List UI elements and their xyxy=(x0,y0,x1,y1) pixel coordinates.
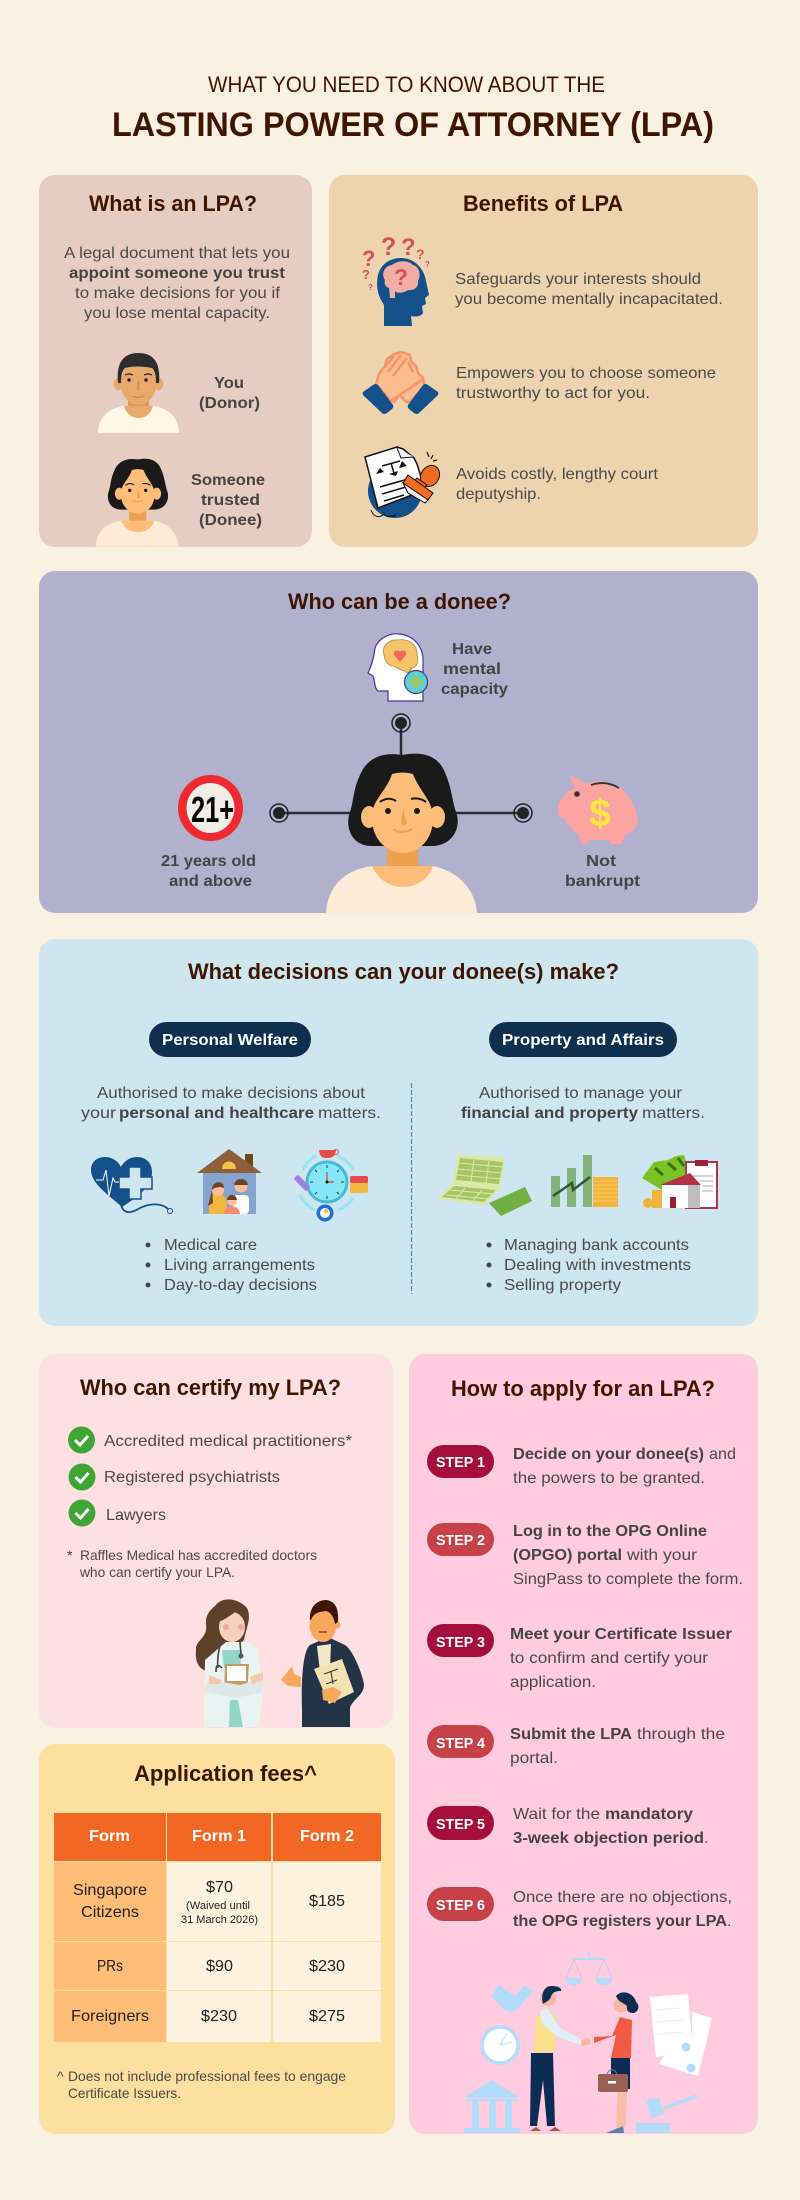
step 1: the powers to be granted. xyxy=(513,1470,705,1487)
icon: mental capacity head xyxy=(368,634,428,701)
icon: 21+ sign xyxy=(178,775,243,841)
list: property and affairs items: Selling property xyxy=(504,1277,621,1294)
step 1: STEP 1 xyxy=(436,1454,485,1471)
step 4: through the xyxy=(637,1726,725,1743)
list: certifiers with check marks: Registered psychiatrists xyxy=(104,1469,280,1486)
step 6: . xyxy=(727,1913,731,1930)
table: fees xyxy=(54,1813,381,2042)
label: you, donor: (Donor) xyxy=(199,395,260,412)
icon: confused head: ? xyxy=(362,246,375,271)
list: certifiers with check marks: Lawyers xyxy=(106,1507,166,1524)
list: certifiers with check marks: Accredited medical practitioners* xyxy=(104,1433,352,1450)
footnote: professional fees: Certificate Issuers. xyxy=(68,2085,181,2101)
step 2: (OPGO) portal xyxy=(513,1547,622,1564)
heading: decisions: What decisions can your donee(s) make? xyxy=(188,959,619,984)
panel: who can certify xyxy=(39,1354,393,1728)
icon: donee woman xyxy=(96,459,179,546)
icon: growth chart and coins xyxy=(551,1155,618,1207)
text: empowers: Empowers you to choose someone xyxy=(456,365,716,382)
table: fees: Foreigners xyxy=(71,2008,149,2025)
label: have mental capacity xyxy=(441,641,508,698)
footnote: raffles medical: Raffles Medical has accredited doctors xyxy=(80,1547,317,1563)
label: someone trusted, donee: trusted xyxy=(201,492,260,509)
pill: personal welfare: Personal Welfare xyxy=(162,1032,298,1049)
panel: what decisions can your donee make xyxy=(39,939,758,1326)
heading: how to apply: How to apply for an LPA? xyxy=(451,1376,715,1401)
step 6 xyxy=(427,1887,732,1930)
text: LPA definition: A legal document that lets you xyxy=(64,245,290,262)
pill: property and affairs: Property and Affairs xyxy=(502,1032,664,1049)
text: avoids court: Avoids costly, lengthy court xyxy=(456,466,659,483)
step 5: Wait for the xyxy=(513,1806,600,1823)
label: 21 years old and above: 21 years old xyxy=(161,853,256,870)
connector lines xyxy=(270,714,532,822)
icon: confused head xyxy=(362,233,430,326)
icon: confused head: ? xyxy=(401,234,416,261)
text: LPA definition: appoint someone you trust xyxy=(69,265,286,282)
icon: donor man xyxy=(98,353,179,433)
step 6: STEP 6 xyxy=(436,1897,485,1914)
label: not bankrupt: Not xyxy=(586,853,617,870)
text: avoids court: deputyship. xyxy=(456,486,541,503)
illustration: lawyer xyxy=(281,1600,364,1727)
table: fees: $90 xyxy=(206,1958,233,1975)
text: property and affairs description: matters. xyxy=(642,1105,705,1122)
icon: clock routine xyxy=(294,1150,368,1222)
panel: application fees xyxy=(39,1744,395,2134)
table: fees: $70 xyxy=(206,1879,233,1896)
icon: confused head: ? xyxy=(425,260,430,269)
step 3: to confirm and certify your xyxy=(510,1650,709,1667)
text: safeguards xyxy=(455,271,723,308)
heading: benefits: Benefits of LPA xyxy=(463,191,623,216)
text: personal welfare description: Authorised to make decisions about xyxy=(97,1085,366,1102)
step 6: the OPG registers your LPA xyxy=(513,1913,727,1930)
footnote: raffles medical: who can certify your LPA. xyxy=(79,1564,235,1580)
step 5: STEP 5 xyxy=(436,1816,485,1833)
icon: document and stamp xyxy=(365,447,443,518)
table: fees: 31 March 2026) xyxy=(181,1914,258,1926)
step 5 xyxy=(427,1806,708,1847)
step 1 xyxy=(427,1445,736,1487)
table: fees: Form xyxy=(89,1828,130,1845)
table: fees: Citizens xyxy=(81,1904,139,1921)
label: someone trusted, donee: Someone xyxy=(191,472,265,489)
list: property and affairs items: Dealing with investments xyxy=(504,1257,691,1274)
list: personal welfare items: Medical care xyxy=(164,1237,257,1254)
table: fees: Form 1 xyxy=(192,1828,246,1845)
footnote: professional fees: ^ xyxy=(57,2068,64,2084)
title xyxy=(112,72,714,144)
footnote: raffles medical xyxy=(67,1547,317,1580)
step 3: Meet your Certificate Issuer xyxy=(510,1626,732,1643)
icon: confused head: ? xyxy=(368,283,373,292)
panel: benefits of LPA xyxy=(329,175,758,547)
table: fees: $230 xyxy=(201,2008,237,2025)
icon: money house and document xyxy=(642,1155,717,1208)
table: fees: $185 xyxy=(309,1893,345,1910)
list: property and affairs items: Managing bank accounts xyxy=(504,1237,689,1254)
step 5: . xyxy=(704,1830,708,1847)
step 3 xyxy=(427,1624,732,1691)
step 2: STEP 2 xyxy=(436,1532,485,1549)
label: 21 years old and above: and above xyxy=(169,873,252,890)
text: empowers: trustworthy to act for you. xyxy=(456,385,650,402)
step 6: Once there are no objections, xyxy=(513,1889,732,1906)
text: safeguards: Safeguards your interests should xyxy=(455,271,701,288)
pill: personal welfare xyxy=(149,1022,311,1057)
list: personal welfare items: Day-to-day decisions xyxy=(164,1277,317,1294)
pill: property and affairs xyxy=(489,1022,677,1057)
text: personal welfare description: your xyxy=(81,1105,117,1122)
heading: certify: Who can certify my LPA? xyxy=(80,1375,341,1400)
heading: donee: Who can be a donee? xyxy=(288,589,511,614)
label: have mental capacity: capacity xyxy=(441,681,508,698)
text: property and affairs description: Authorised to manage your xyxy=(479,1085,683,1102)
label: someone trusted, donee: (Donee) xyxy=(199,512,262,529)
icon: piggy bank: $ xyxy=(589,793,611,835)
label: have mental capacity: Have xyxy=(452,641,492,658)
step 2 xyxy=(427,1523,743,1588)
step 2: Log in to the OPG Online xyxy=(513,1523,707,1540)
step 1: Decide on your donee(s) xyxy=(513,1446,704,1463)
icon: 21+ sign: 21+ xyxy=(191,789,234,830)
table: fees: $275 xyxy=(309,2008,345,2025)
icon: confused head: ? xyxy=(362,267,370,282)
text: property and affairs description: financial and property xyxy=(461,1105,638,1122)
footnote: professional fees xyxy=(57,2068,346,2101)
list: certifiers with check marks xyxy=(68,1426,352,1526)
step 3: application. xyxy=(510,1674,596,1691)
icon: clasped hands xyxy=(363,352,438,414)
title: WHAT YOU NEED TO KNOW ABOUT THE xyxy=(208,72,605,97)
label: have mental capacity: mental xyxy=(443,661,501,678)
panel: how to apply xyxy=(409,1354,758,2134)
panel: what is an LPA xyxy=(39,175,312,547)
text: property and affairs description xyxy=(461,1085,705,1122)
icon: confused head: ? xyxy=(381,233,396,261)
panel: who can be a donee xyxy=(39,571,758,913)
table: fees: (Waived until xyxy=(186,1900,250,1912)
step 2: with your xyxy=(626,1547,698,1564)
icon: bank ledger and card xyxy=(437,1154,532,1216)
list: personal welfare items xyxy=(146,1237,317,1294)
step 3: STEP 3 xyxy=(436,1634,485,1651)
label: not bankrupt: bankrupt xyxy=(565,873,641,890)
label: you, donor: You xyxy=(214,375,244,392)
step 4: portal. xyxy=(510,1750,558,1767)
table: fees: $230 xyxy=(309,1958,345,1975)
step 4: STEP 4 xyxy=(436,1735,486,1752)
step 4 xyxy=(427,1725,725,1767)
icon: family in house xyxy=(197,1149,262,1214)
text: avoids court xyxy=(456,466,659,503)
step 5: 3-week objection period xyxy=(513,1830,704,1847)
text: personal welfare description: matters. xyxy=(318,1105,381,1122)
list: personal welfare items: Living arrangements xyxy=(164,1257,315,1274)
text: safeguards: you become mentally incapacitated. xyxy=(455,291,723,308)
footnote: raffles medical: * xyxy=(67,1547,73,1563)
icon: confused head: ? xyxy=(394,264,408,290)
step 2: SingPass to complete the form. xyxy=(513,1571,743,1588)
icon: piggy bank xyxy=(558,776,637,844)
step 4: Submit the LPA xyxy=(510,1726,632,1743)
text: empowers xyxy=(456,365,716,402)
title: LASTING POWER OF ATTORNEY (LPA) xyxy=(112,106,714,144)
icon: confused head: ? xyxy=(416,246,425,262)
illustration: doctor xyxy=(196,1599,263,1727)
step 5: mandatory xyxy=(605,1806,693,1823)
heading: what is an LPA: What is an LPA? xyxy=(89,191,257,216)
label: you, donor xyxy=(199,375,260,412)
heading: fees: Application fees^ xyxy=(134,1761,317,1786)
text: personal welfare description: personal and healthcare xyxy=(119,1105,314,1122)
illustration: central donee woman xyxy=(326,754,477,913)
text: LPA definition xyxy=(64,245,290,322)
text: LPA definition: to make decisions for you if xyxy=(75,285,281,302)
footnote: professional fees: Does not include professional fees to engage xyxy=(68,2068,346,2084)
list: property and affairs items xyxy=(486,1237,691,1294)
table: fees: PRs xyxy=(97,1958,123,1975)
step 1: and xyxy=(709,1446,736,1463)
label: 21 years old and above xyxy=(161,853,256,890)
text: personal welfare description xyxy=(81,1085,381,1122)
label: someone trusted, donee xyxy=(191,472,265,529)
table: fees: Singapore xyxy=(73,1882,147,1899)
icon: heart with stethoscope xyxy=(91,1157,172,1214)
label: not bankrupt xyxy=(565,853,641,890)
table: fees: Form 2 xyxy=(300,1828,354,1845)
text: LPA definition: you lose mental capacity. xyxy=(84,305,270,322)
illustration: handshake and legal symbols xyxy=(464,1951,712,2133)
